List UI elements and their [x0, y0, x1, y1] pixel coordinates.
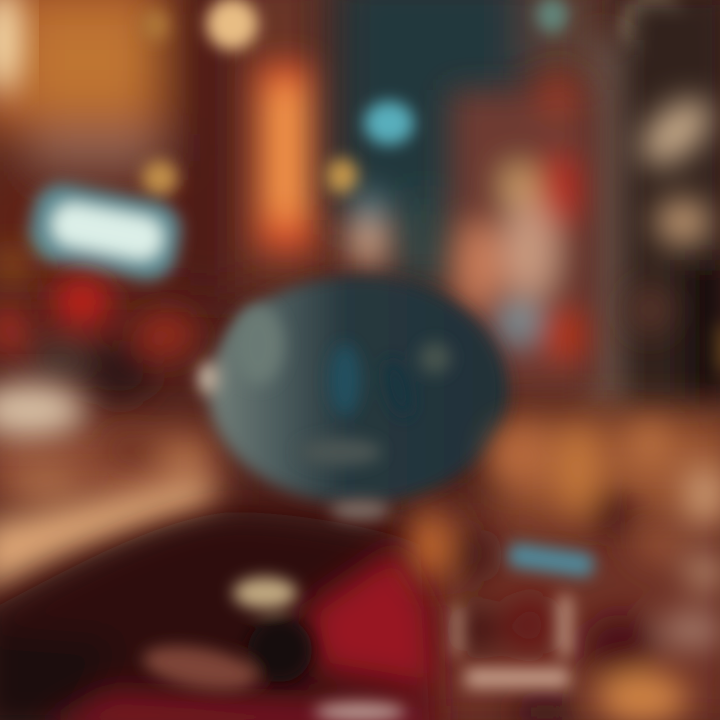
right hanging goods	[628, 86, 720, 334]
bright light at left edge	[0, 0, 21, 95]
stall tiles on the left	[9, 434, 205, 498]
orange neon sign	[256, 62, 316, 252]
right dark stalls	[592, 0, 720, 410]
pale tray strips	[452, 595, 572, 688]
red sleeve	[50, 545, 440, 720]
dark teal tower background	[335, 0, 605, 290]
centre-right colourful stall	[346, 71, 590, 390]
light table edge	[0, 474, 215, 595]
coin	[208, 276, 508, 504]
white cloth at left	[0, 382, 86, 438]
dark hand and arm	[0, 512, 430, 720]
teal glowing spot	[364, 101, 414, 145]
blue price label	[507, 542, 595, 578]
coin engraved details	[198, 305, 451, 520]
lanterns and small lights	[141, 0, 720, 374]
left red stall goods	[0, 249, 197, 404]
fingers and cuff highlights	[139, 577, 406, 720]
glowing white sign	[24, 178, 186, 286]
top-left warm storefront	[0, 0, 325, 300]
warm market stalls lower band	[0, 415, 720, 720]
bottom-right checkered goods	[412, 421, 720, 720]
